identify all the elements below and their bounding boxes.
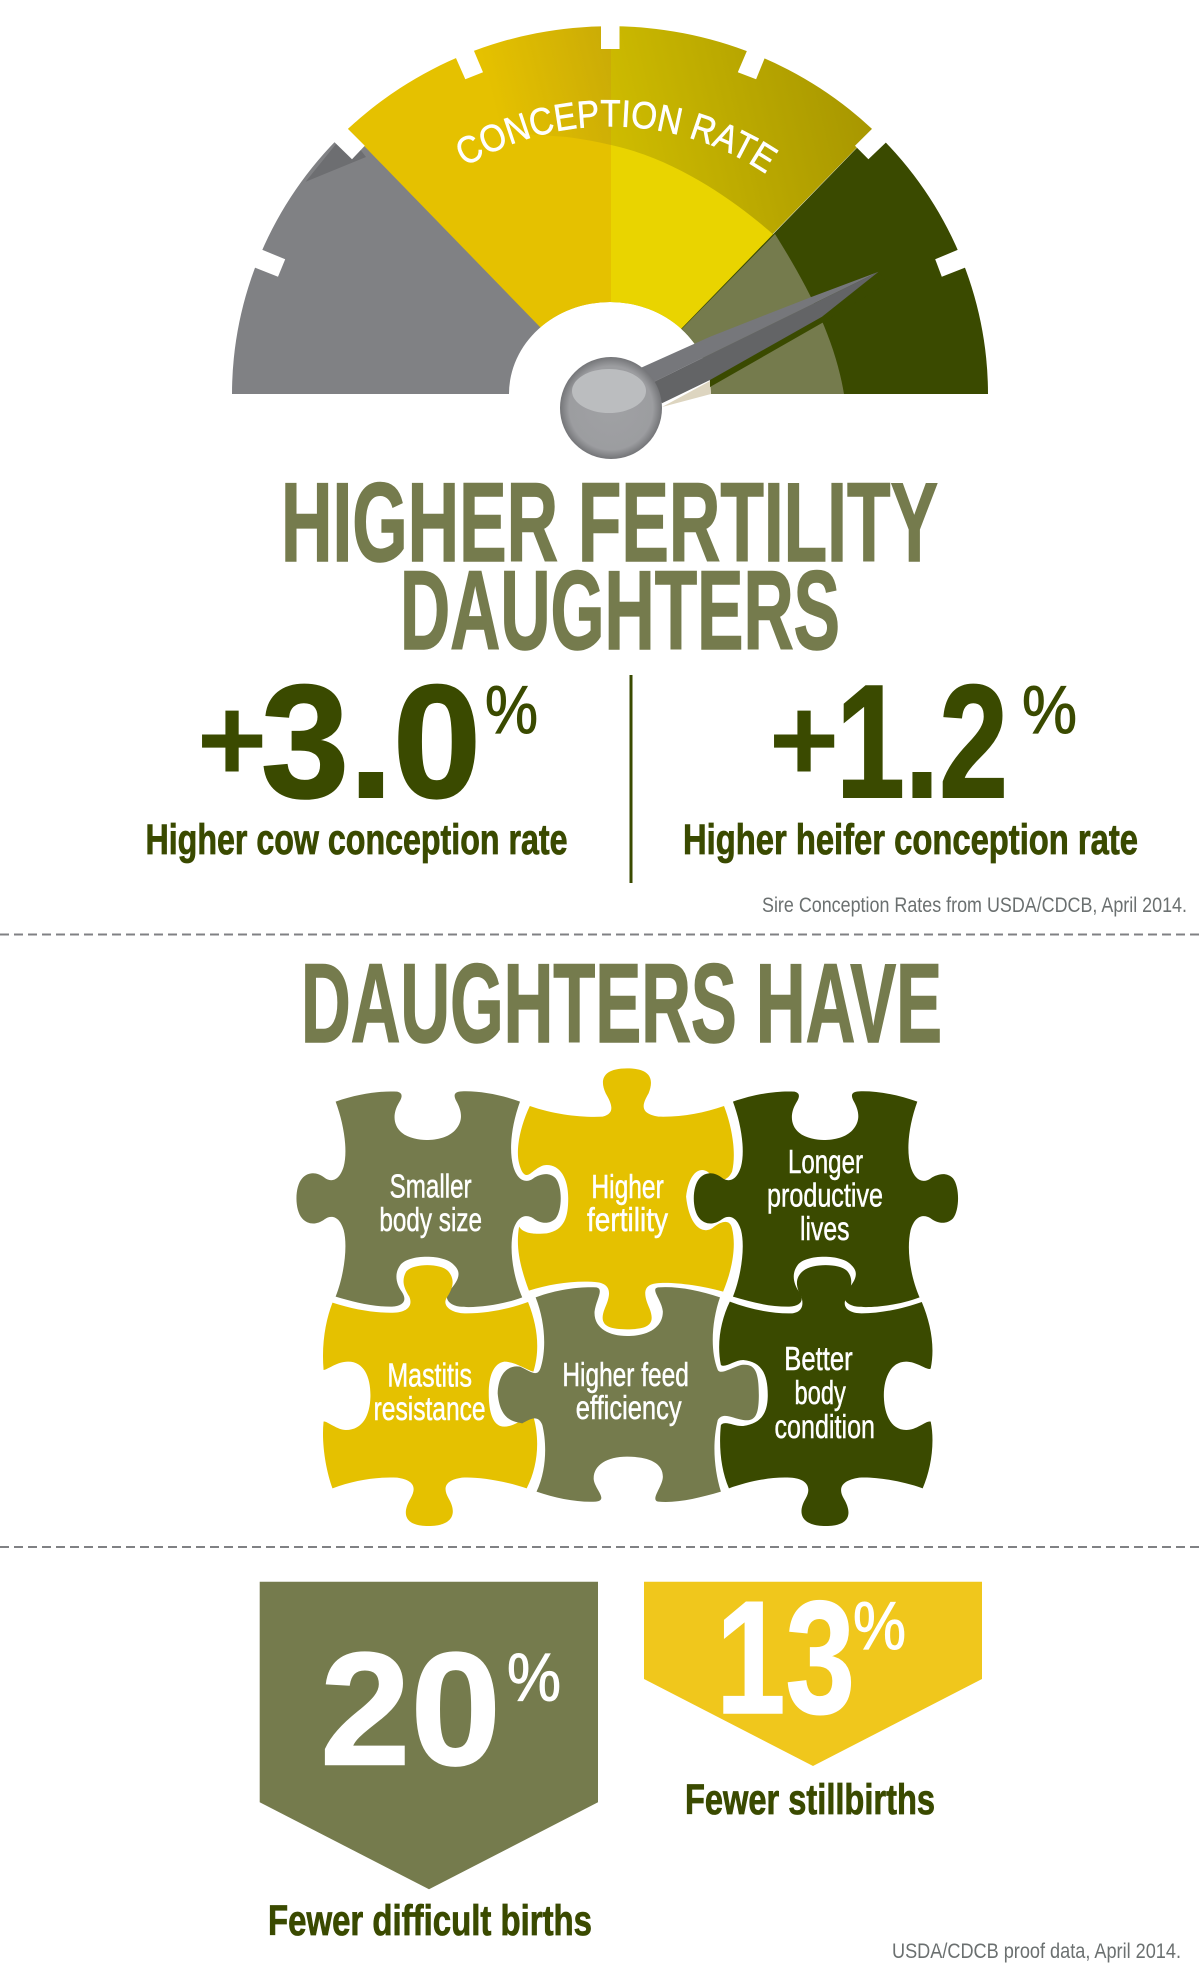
puzzle text: better body condition: Better [784, 1340, 853, 1377]
gauge segment: darker grey corner [306, 144, 366, 182]
gauge segment: yellow right inner [611, 145, 773, 330]
puzzle text: smaller body size [379, 1168, 482, 1238]
badge: 13 percent: % [853, 1588, 906, 1664]
stat: heifer conception: + [769, 673, 839, 807]
puzzle piece: higher feed efficiency [498, 1287, 759, 1502]
stat: cow conception: % [485, 672, 538, 748]
stat: cow conception: Higher cow conception rate [146, 816, 568, 864]
gauge segment: low grey [232, 142, 541, 394]
puzzle text: mastitis resistance [374, 1356, 486, 1427]
puzzle text: longer productive lives: productive [767, 1176, 883, 1214]
puzzle piece: longer productive lives [694, 1091, 958, 1307]
badge: 20 percent [260, 1582, 598, 1889]
stat: cow conception [146, 652, 568, 864]
puzzle text: better body condition: body [794, 1374, 846, 1411]
puzzle text: smaller body size: body size [379, 1201, 482, 1238]
badge: 20 percent: 20 [320, 1620, 501, 1800]
puzzle text: higher fertility [587, 1168, 668, 1238]
puzzle text: smaller body size: Smaller [390, 1168, 472, 1204]
puzzle piece: smaller body size [296, 1091, 561, 1307]
puzzle text: higher feed efficiency [562, 1356, 689, 1426]
needle shadow: beige [662, 381, 711, 407]
stat: cow conception: 3.0 [261, 652, 481, 832]
puzzle text: higher feed efficiency: efficiency [576, 1389, 682, 1426]
stat: cow conception: + [197, 673, 267, 807]
puzzle piece: mastitis resistance [323, 1265, 537, 1526]
badge: 13 percent [644, 1568, 982, 1766]
puzzle text: mastitis resistance: resistance [374, 1390, 486, 1427]
puzzle [296, 1068, 958, 1526]
gauge segment: olive inner [682, 234, 844, 394]
title: higher fertility daughters: DAUGHTERS [400, 548, 840, 673]
puzzle text: longer productive lives: Longer [788, 1143, 863, 1180]
gauge [232, 26, 988, 459]
puzzle piece: higher fertility [518, 1068, 734, 1329]
needle shadow: green [710, 272, 888, 387]
stat: heifer conception [683, 652, 1138, 864]
stat: heifer conception: 1.2 [836, 652, 1008, 832]
gauge segment: yellow right [611, 26, 872, 328]
gauge curved label: CONCEPTION RATE [457, 100, 779, 174]
puzzle text: higher feed efficiency: Higher feed [562, 1356, 689, 1393]
needle knob [560, 357, 662, 459]
puzzle text: better body condition: condition [774, 1408, 875, 1445]
puzzle text: mastitis resistance: Mastitis [387, 1356, 472, 1394]
gauge segment: yellow left [348, 26, 611, 328]
gauge segment: high dark green [681, 142, 988, 394]
puzzle text: longer productive lives: lives [800, 1210, 850, 1247]
badge: 13 percent: 13 [716, 1568, 855, 1748]
needle [641, 272, 879, 403]
title: higher fertility daughters [281, 460, 938, 673]
gauge tick marks [238, 20, 982, 277]
puzzle text: higher fertility: Higher [591, 1168, 664, 1205]
label: fewer difficult births: Fewer difficult births [268, 1897, 592, 1945]
puzzle text: better body condition [774, 1340, 875, 1445]
badge: 20 percent: % [507, 1640, 561, 1716]
puzzle text: longer productive lives [767, 1143, 883, 1247]
label: fewer stillbirths: Fewer stillbirths [685, 1776, 935, 1824]
stat: heifer conception: % [1022, 672, 1077, 748]
puzzle piece: better body condition [719, 1265, 932, 1526]
puzzle text: higher fertility: fertility [587, 1201, 668, 1238]
gauge segment: yellow left inner [348, 122, 611, 328]
vertical divider [630, 675, 632, 883]
